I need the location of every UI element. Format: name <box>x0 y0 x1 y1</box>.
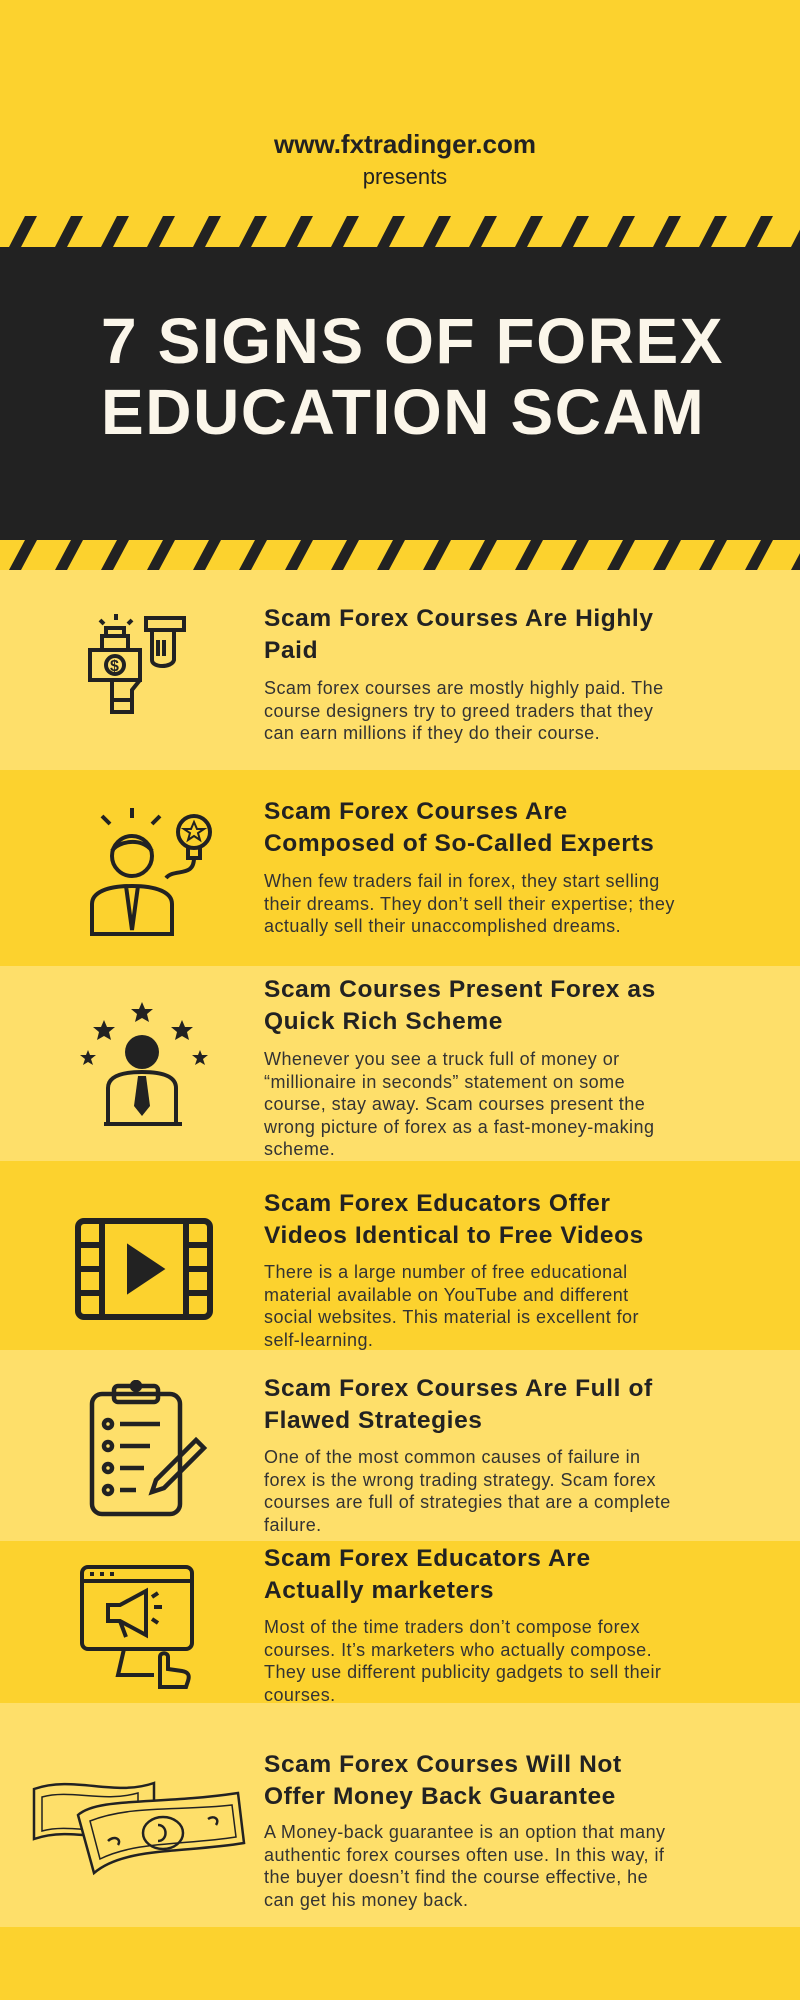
panel 7: money back <box>0 1703 800 1927</box>
heading <box>264 976 656 1035</box>
body text <box>264 871 675 936</box>
body text: can get his money back. <box>264 1890 468 1910</box>
heading: Actually marketers <box>264 1577 494 1604</box>
body text: Scam forex courses are mostly highly paid. The <box>264 678 664 698</box>
heading: Scam Courses Present Forex as <box>264 976 656 1003</box>
body text: Whenever you see a truck full of money or <box>264 1049 620 1069</box>
icon: video film <box>75 1218 213 1320</box>
body text: failure. <box>264 1514 322 1534</box>
title: 7 SIGNS OF FOREX <box>101 305 724 377</box>
heading <box>264 1190 644 1249</box>
body text <box>264 1049 654 1159</box>
panel 6: marketers <box>80 1545 661 1704</box>
heading <box>264 798 654 857</box>
body text: social websites. This material is excellent for <box>264 1307 639 1327</box>
body text: A Money-back guarantee is an option that many <box>264 1822 665 1842</box>
body text: course designers try to greed traders that they <box>264 700 653 720</box>
heading: Scam Forex Courses Will Not <box>264 1751 622 1778</box>
body text: One of the most common causes of failure in <box>264 1447 641 1467</box>
body text: “millionaire in seconds” statement on some <box>264 1072 625 1092</box>
heading: Scam Forex Courses Are Full of <box>264 1375 653 1402</box>
body text: forex is the wrong trading strategy. Scam forex <box>264 1470 656 1490</box>
body text: wrong picture of forex as a fast-money-making <box>264 1116 654 1136</box>
panel 2: so-called experts <box>90 798 675 936</box>
heading <box>264 1375 653 1434</box>
title: EDUCATION SCAM <box>101 376 705 448</box>
body text: When few traders fail in forex, they start selling <box>264 871 660 891</box>
heading: Quick Rich Scheme <box>264 1008 503 1035</box>
heading: Paid <box>264 637 318 664</box>
panel 1: highly paid <box>0 570 800 770</box>
body text <box>264 1822 665 1910</box>
body text: course, stay away. Scam courses present the <box>264 1094 645 1114</box>
body text: can earn millions if they do their course. <box>264 723 600 743</box>
icon: expert with lightbulb <box>90 808 212 936</box>
icon: money hand: $ <box>110 658 119 675</box>
body text: authentic forex courses often use. In this way, if <box>264 1844 664 1864</box>
website header: www.fxtradinger.com <box>274 129 536 159</box>
heading <box>264 1545 591 1604</box>
body text <box>264 1262 639 1350</box>
website header: presents <box>363 164 447 189</box>
heading <box>264 1751 622 1810</box>
body text: courses. <box>264 1684 336 1704</box>
title banner with hazard stripes <box>0 216 800 570</box>
heading: Scam Forex Educators Are <box>264 1545 591 1572</box>
body text: material available on YouTube and different <box>264 1284 629 1304</box>
body text <box>264 1617 661 1704</box>
body text: They use different publicity gadgets to sell their <box>264 1662 661 1682</box>
body text: their dreams. They don’t sell their expertise; they <box>264 894 675 914</box>
website header <box>274 129 536 189</box>
body text: actually sell their unaccomplished dreams. <box>264 916 621 936</box>
heading: Composed of So-Called Experts <box>264 830 654 857</box>
body text: Most of the time traders don’t compose forex <box>264 1617 640 1637</box>
heading: Offer Money Back Guarantee <box>264 1783 616 1810</box>
body text: courses. It’s marketers who actually compose. <box>264 1640 652 1660</box>
body text: the buyer doesn’t find the course effective, he <box>264 1867 648 1887</box>
title <box>101 305 724 448</box>
panel 5: flawed strategies <box>0 1350 800 1541</box>
icon: megaphone monitor <box>80 1565 194 1689</box>
body text <box>264 678 664 743</box>
heading: Scam Forex Courses Are Highly <box>264 605 654 632</box>
heading: Scam Forex Courses Are <box>264 798 568 825</box>
icon: banknotes <box>32 1781 246 1876</box>
body text: scheme. <box>264 1139 335 1159</box>
heading: Flawed Strategies <box>264 1407 483 1434</box>
heading: Videos Identical to Free Videos <box>264 1222 644 1249</box>
icon: clipboard with pencil <box>90 1380 208 1516</box>
icon: money hand <box>88 614 186 714</box>
body text: courses are full of strategies that are a complete <box>264 1492 671 1512</box>
body text: self-learning. <box>264 1330 373 1350</box>
heading <box>264 605 654 664</box>
body text <box>264 1447 671 1534</box>
panel 3: quick rich <box>0 966 800 1161</box>
body text: There is a large number of free educational <box>264 1262 628 1282</box>
heading: Scam Forex Educators Offer <box>264 1190 610 1217</box>
panel 4: videos <box>75 1190 644 1350</box>
icon: person with stars <box>80 1002 208 1126</box>
